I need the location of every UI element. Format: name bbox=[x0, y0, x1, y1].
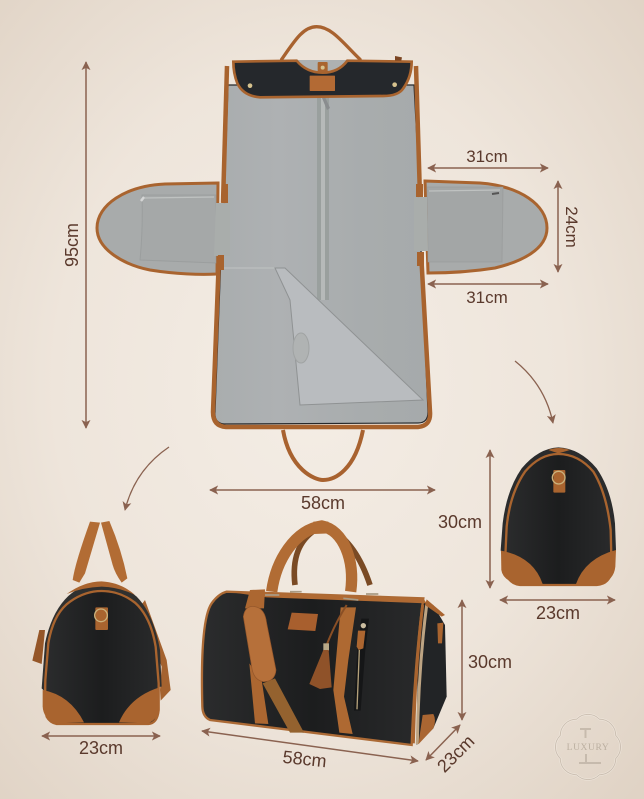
arrow: open to side view bbox=[125, 447, 169, 510]
corner leather right bbox=[119, 687, 159, 723]
centre zipper bbox=[317, 97, 330, 300]
dimension: front view 30cm bbox=[462, 600, 512, 720]
back handle bbox=[294, 530, 370, 585]
grey interior lining bbox=[215, 85, 428, 424]
corner tab bbox=[395, 56, 402, 61]
rail junction blocks bbox=[218, 184, 424, 270]
top brown trim bbox=[67, 581, 135, 595]
shoulder pad bbox=[243, 606, 276, 682]
leather panel bbox=[45, 591, 159, 724]
corner leather right bbox=[576, 550, 616, 585]
shoulder strap behind bbox=[140, 600, 171, 701]
tassel bbox=[32, 630, 45, 664]
arrow: open to back view bbox=[515, 361, 553, 423]
outer band bbox=[501, 447, 616, 563]
top flap and handle bbox=[233, 27, 412, 97]
dimension: front view 58cm bbox=[202, 731, 418, 771]
front handle bbox=[272, 526, 352, 592]
top handle bbox=[282, 27, 360, 59]
handle base rings bbox=[265, 592, 378, 600]
front zipper bbox=[354, 619, 369, 711]
fold badge bbox=[293, 333, 309, 363]
black flap bbox=[233, 61, 412, 97]
dimension: front view 30cm: 30cm bbox=[468, 652, 512, 672]
strap tab with ring bbox=[552, 470, 565, 493]
logo patch bbox=[288, 613, 318, 631]
handles bbox=[73, 521, 127, 583]
left side wing bbox=[97, 183, 218, 274]
side zipper stripe bbox=[413, 605, 423, 743]
lower panel seam bbox=[224, 267, 276, 269]
bag side rails bbox=[213, 66, 430, 427]
front view bag bbox=[202, 522, 447, 745]
logo patch bbox=[310, 76, 335, 91]
dimension: height 95cm: 95cm bbox=[62, 223, 82, 267]
open garment bag bbox=[97, 27, 547, 480]
dimension: back view 30cm: 30cm bbox=[438, 512, 482, 532]
bag body bbox=[202, 592, 423, 745]
dimension: front view 58cm: 58cm bbox=[282, 747, 328, 771]
dimension: wing 31cm top: 31cm bbox=[466, 147, 508, 166]
dimension: back view 30cm bbox=[438, 450, 490, 588]
dimension: wing 31cm bottom bbox=[428, 284, 548, 307]
luxury seal bbox=[555, 714, 621, 780]
end zip tab bbox=[425, 599, 445, 643]
dimension: wing 31cm bottom: 31cm bbox=[466, 288, 508, 307]
bottom handle bbox=[283, 430, 363, 480]
folded lining corner bbox=[275, 268, 423, 405]
flap tab bbox=[318, 62, 328, 73]
dimension: back view 23cm: 23cm bbox=[536, 603, 580, 623]
dimension: wing 31cm top bbox=[428, 147, 548, 168]
strap tab with ring bbox=[95, 607, 108, 630]
handle clasp bbox=[313, 522, 330, 534]
dimension: wing 24cm bbox=[558, 181, 581, 272]
right strap bbox=[333, 607, 356, 734]
top trim bbox=[227, 592, 427, 603]
zipper top bbox=[548, 448, 570, 453]
dimension: front view depth 23cm: 23cm bbox=[433, 731, 478, 776]
dimension: side view 23cm: 23cm bbox=[79, 738, 123, 758]
left strap bbox=[245, 589, 268, 724]
tassel bbox=[309, 605, 347, 689]
back side view bag bbox=[501, 447, 616, 585]
dimension: back view 23cm bbox=[500, 600, 615, 623]
luxury seal: LUXURY bbox=[567, 743, 609, 753]
diagonal shoulder strap bbox=[263, 678, 304, 733]
corner leather left bbox=[43, 690, 84, 723]
corner leather left bbox=[501, 551, 543, 585]
end corner leather bbox=[418, 714, 435, 744]
wing connector panels bbox=[214, 197, 428, 256]
left side view bag bbox=[32, 521, 171, 724]
flap window bbox=[297, 60, 348, 73]
outer side band bbox=[42, 582, 162, 697]
right side wing bbox=[425, 181, 547, 273]
dimension: width 58cm: 58cm bbox=[301, 493, 345, 513]
leather panel bbox=[505, 454, 612, 585]
dimension: side view 23cm bbox=[42, 736, 160, 758]
end panel bbox=[417, 601, 447, 745]
dimension: wing 24cm: 24cm bbox=[562, 206, 581, 248]
rivets bbox=[248, 83, 252, 88]
